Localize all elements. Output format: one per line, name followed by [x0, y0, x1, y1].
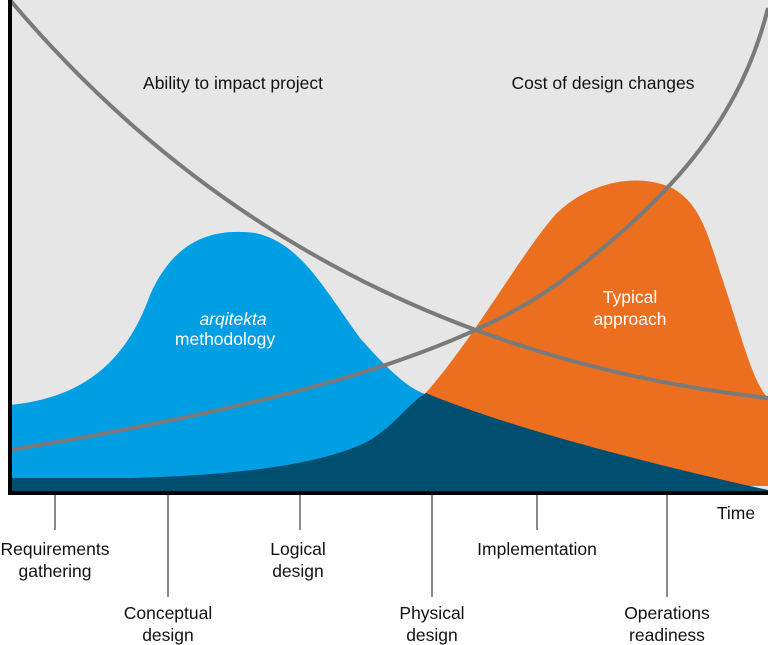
phase labels: Implementation: [477, 539, 597, 559]
area label: typical: [594, 287, 666, 329]
phase labels: Physical: [399, 603, 465, 623]
axis label: time: Time: [717, 503, 755, 523]
phase labels: [1, 539, 710, 645]
area: overlap (navy): [10, 393, 768, 493]
curve: cost of design changes: [10, 8, 768, 450]
area label: typical: Typical: [603, 287, 657, 307]
area: arqitekta methodology (blue): [10, 232, 428, 493]
area: typical approach (orange): [422, 181, 768, 486]
phase labels: Operations: [624, 603, 710, 623]
phase labels: design: [272, 561, 324, 581]
curve: ability to impact project: [10, 0, 768, 398]
curve label: cost: Cost of design changes: [512, 73, 695, 93]
phase labels: Requirements: [1, 539, 110, 559]
phase ticks: [55, 495, 667, 597]
axes: [8, 0, 768, 495]
area label: arqitekta: arqitekta: [199, 309, 267, 329]
area label: typical: approach: [594, 309, 666, 329]
area label: arqitekta: methodology: [175, 329, 275, 349]
phase labels: readiness: [629, 625, 705, 645]
area label: arqitekta: [175, 309, 275, 349]
chart background: [10, 0, 768, 493]
phase labels: Conceptual: [124, 603, 212, 623]
phase labels: design: [406, 625, 458, 645]
curve label: ability: Ability to impact project: [143, 73, 323, 93]
phase labels: gathering: [19, 561, 91, 581]
phase labels: design: [142, 625, 194, 645]
phase labels: Logical: [270, 539, 326, 559]
